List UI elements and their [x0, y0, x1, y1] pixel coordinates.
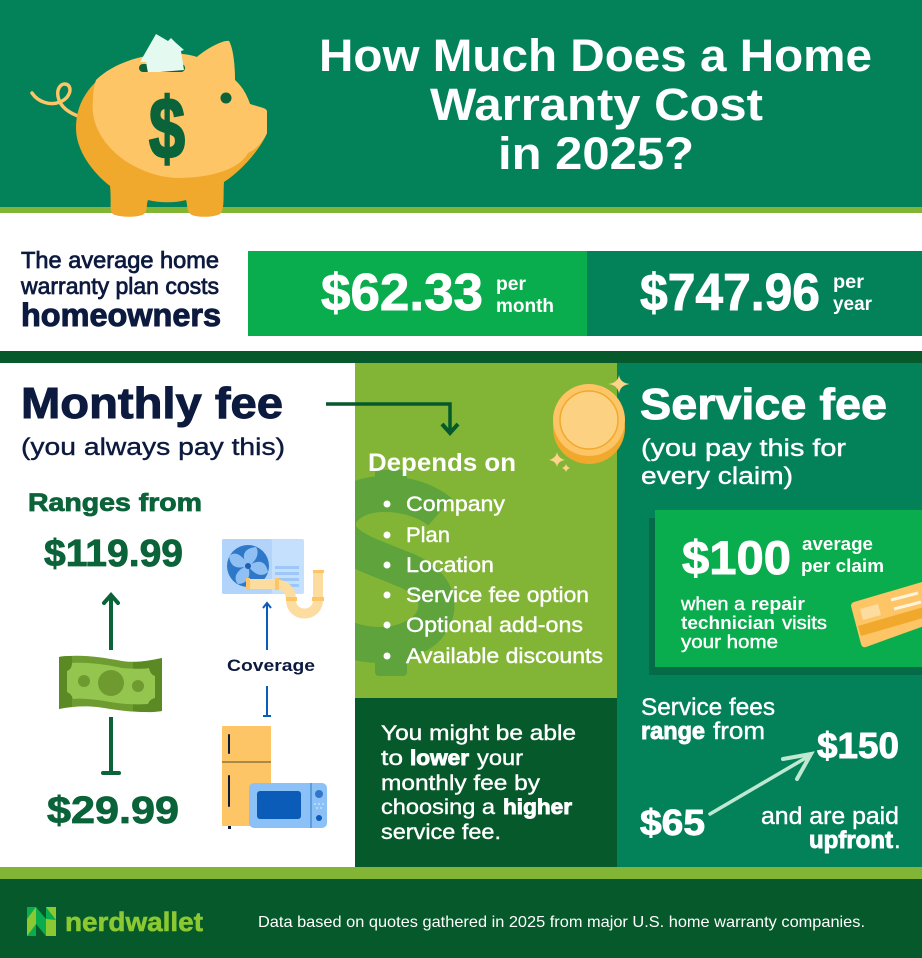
subheading: pay per claim: every claim): [641, 463, 793, 490]
text: service fees range: [641, 694, 775, 745]
list: cost factors: Available discounts: [406, 645, 603, 668]
panel: header: [0, 0, 922, 213]
panel: depends on: [330, 363, 617, 698]
subheading: you always pay this: (you always pay this): [21, 434, 285, 461]
dark band: [0, 351, 922, 363]
panel: lower your fee tip: service fee.: [381, 821, 501, 844]
text: service fees range: range: [641, 718, 705, 745]
list: cost factors: Plan: [406, 524, 450, 547]
icon: piggy bank: [32, 34, 267, 217]
number: high monthly fee: $119.99: [44, 533, 183, 575]
footer stripe: [0, 867, 922, 879]
panel: lower your fee tip: to: [381, 747, 403, 770]
text: ranges from: Ranges from: [28, 489, 202, 517]
panel: lower your fee tip: [355, 698, 617, 867]
arrow: up to high fee: [104, 595, 118, 650]
icon: nerdwallet logo mark: [27, 907, 56, 936]
panel: yearly cost stat: $747.96: [640, 264, 820, 322]
text: average plan cost intro: warranty plan costs: [20, 273, 219, 299]
panel: average claim card: technician: [681, 613, 775, 633]
icon: fridge and microwave: [222, 726, 327, 829]
arrow: coverage up: [263, 603, 271, 650]
panel: monthly cost stat: $62.33: [321, 264, 483, 322]
number: low service fee: $65: [640, 802, 705, 843]
text: paid upfront: [761, 803, 901, 854]
number: low monthly fee: $29.99: [47, 790, 179, 832]
panel: average claim card: when a: [680, 594, 746, 614]
arrow: low to high service fee: [710, 754, 811, 814]
title: in 2025?: [498, 128, 694, 179]
icon: dollar sign on piggy: $: [149, 81, 185, 177]
panel: lower your fee tip: lower: [410, 747, 469, 770]
label: coverage: Coverage: [227, 656, 315, 675]
panel: monthly cost stat: month: [496, 296, 554, 317]
logo wordmark: nerdwallet: [65, 907, 203, 937]
subheading: pay per claim: [641, 435, 846, 490]
panel: monthly fee: [0, 363, 355, 867]
heading: depends on: Depends on: [368, 449, 516, 477]
panel: monthly cost stat: [248, 251, 587, 336]
title: How Much Does a Home: [319, 30, 872, 81]
icon: background dollar sign: [330, 470, 440, 676]
panel: average claim card: $100: [682, 531, 791, 584]
heading: monthly fee: Monthly fee: [21, 379, 283, 428]
icon: air conditioner and pipe: [222, 539, 324, 614]
panel: service fee: [617, 363, 922, 867]
text: paid upfront: and are paid: [761, 803, 899, 830]
panel: footer: [0, 879, 922, 958]
arrow: coverage down: [263, 686, 271, 716]
panel: average claim card: repair: [751, 594, 805, 614]
icon: credit card: [851, 582, 922, 647]
panel: average claim card: your home: [681, 632, 778, 652]
panel: lower your fee tip: choosing a: [381, 796, 495, 819]
panel: yearly cost stat: [587, 251, 922, 336]
list: cost factors: Location: [406, 554, 494, 577]
text: average plan cost intro: The average home: [21, 247, 219, 273]
title: [319, 30, 872, 179]
title: Warranty Cost: [430, 79, 763, 130]
arrow: monthly fee to depends on: [326, 404, 458, 433]
subheading: pay per claim: (you pay this for: [641, 435, 846, 462]
text: service fees range: Service fees: [641, 694, 775, 721]
number: high service fee: $150: [817, 725, 899, 766]
panel: lower your fee tip: your: [477, 747, 523, 770]
list: cost factors: Service fee option: [406, 584, 589, 607]
panel: yearly cost stat: per: [833, 272, 865, 293]
panel: monthly cost stat: per: [496, 274, 527, 295]
heading: service fee: Service fee: [640, 380, 887, 429]
panel: yearly cost stat: year: [833, 294, 873, 315]
panel: lower your fee tip: monthly fee by: [381, 772, 541, 795]
text: average plan cost intro: homeowners: [21, 297, 221, 333]
icon: dollar bill: [59, 656, 162, 712]
list: cost factors: [384, 493, 603, 668]
list: cost factors: Optional add-ons: [406, 614, 583, 637]
panel: average claim card: visits: [782, 613, 827, 633]
list: cost factors: Company: [406, 493, 506, 516]
panel: average claim card: average: [802, 534, 873, 554]
text: average plan cost intro: [20, 247, 221, 333]
text: paid upfront: upfront: [809, 827, 893, 854]
panel: average claim card: [649, 510, 922, 675]
text: paid upfront: .: [894, 827, 901, 854]
panel: average claim card: per claim: [801, 556, 884, 576]
source note: Data based on quotes gathered in 2025 from major U.S. home warranty companies.: [258, 914, 865, 931]
text: service fees range: from: [713, 718, 765, 745]
arrow: down to low fee: [103, 717, 119, 773]
panel: lower your fee tip: higher: [503, 796, 572, 819]
icon: gold coin: [549, 375, 630, 472]
panel: lower your fee tip: You might be able: [381, 722, 576, 745]
